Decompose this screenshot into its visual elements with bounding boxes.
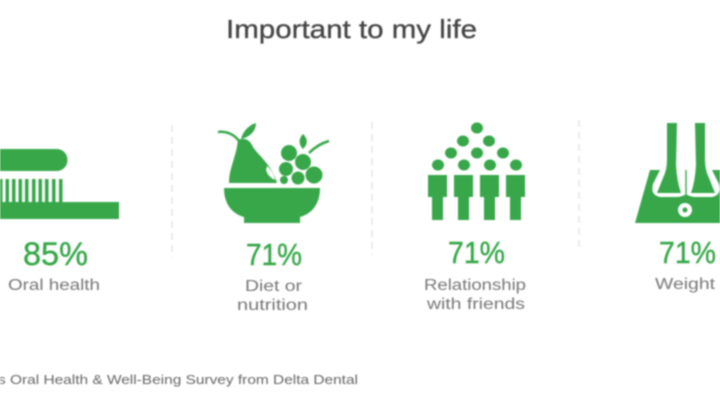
icon: weight scale with feet (635, 123, 720, 223)
label: diet or nutrition: nutrition (237, 297, 308, 314)
icon: fruit bowl (218, 123, 329, 223)
label: relationship with friends: Relationship (424, 277, 526, 294)
footnote: s Oral Health & Well-Being Survey from Delta Dental (0, 372, 358, 387)
icon: toothbrush (0, 149, 119, 219)
panel: oral health (0, 149, 119, 294)
percentage: 85%: 85% (23, 236, 88, 272)
panel: diet or nutrition (218, 123, 329, 314)
label: relationship with friends: with friends (426, 296, 525, 313)
icon: group of people (428, 122, 525, 220)
label: weight: Weight (655, 276, 716, 293)
label: diet or nutrition: Diet or (245, 278, 302, 295)
panel: relationship with friends (424, 122, 526, 313)
percentage: 71%: 71% (448, 235, 505, 270)
panel: weight (635, 123, 720, 293)
title: Important to my life (226, 14, 477, 44)
label: oral health: Oral health (8, 277, 100, 294)
percentage: 71%: 71% (659, 235, 716, 270)
percentage: 71%: 71% (246, 237, 302, 272)
